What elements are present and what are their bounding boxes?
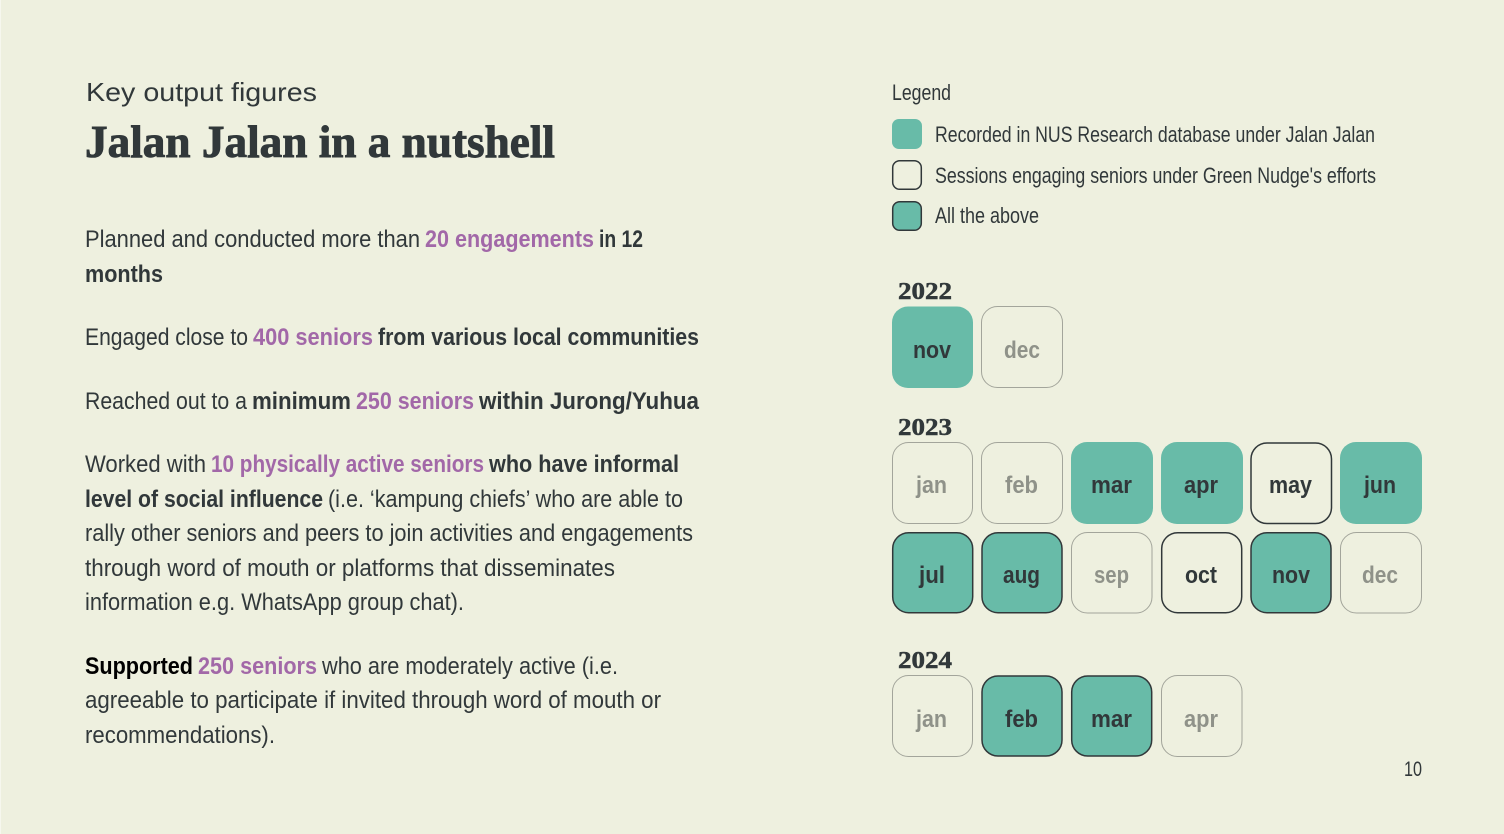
month: feb 2024: feb xyxy=(1005,706,1038,733)
legend item: sessions: Sessions engaging seniors under Green Nudge's efforts xyxy=(935,163,1376,188)
text block: active seniors xyxy=(85,451,693,616)
text block: active seniors: information e.g. WhatsApp group chat). xyxy=(85,589,464,616)
month: apr 2024: apr xyxy=(1184,706,1218,733)
text block: seniors reached: 250 seniors xyxy=(356,388,474,415)
month: nov 2023 xyxy=(1251,533,1331,613)
text block: seniors engaged: Engaged close to xyxy=(85,324,248,351)
text block: seniors reached xyxy=(85,388,700,415)
calendar 2024 xyxy=(892,648,1242,756)
month: aug 2023: aug xyxy=(1003,562,1040,589)
legend xyxy=(892,80,1376,230)
year label 2023: 2023 xyxy=(898,415,952,441)
page number: 10 xyxy=(1404,758,1422,781)
month: nov 2022 xyxy=(892,306,973,388)
kicker heading: Key output figures xyxy=(86,77,317,107)
legend item: recorded: Recorded in NUS Research database under Jalan Jalan xyxy=(935,122,1375,147)
month: apr 2023 xyxy=(1161,442,1243,524)
month: apr 2023: apr xyxy=(1184,472,1218,499)
text block: engagements: Planned and conducted more than xyxy=(85,226,420,253)
text block: moderately active seniors: 250 seniors xyxy=(198,653,317,680)
text block: engagements: months xyxy=(85,261,163,288)
month: feb 2023: feb xyxy=(1005,472,1038,499)
month: jan 2023: jan xyxy=(915,472,947,499)
text block: seniors engaged xyxy=(85,324,699,351)
month: jan 2024 xyxy=(892,676,972,756)
text block: active seniors: 10 physically active seniors xyxy=(211,451,484,478)
month: sep 2023 xyxy=(1072,532,1152,613)
month: dec 2022 xyxy=(982,306,1062,388)
month: jun 2023: jun xyxy=(1363,472,1396,499)
month: jan 2024: jan xyxy=(915,706,947,733)
text block: moderately active seniors: agreeable to participate if invited through word of mouth or xyxy=(85,687,661,714)
legend item: all: All the above xyxy=(935,203,1039,228)
legend item: all xyxy=(893,202,1039,230)
month: nov 2022: nov xyxy=(913,337,952,364)
month: oct 2023 xyxy=(1162,533,1242,613)
text block: active seniors: level of social influence xyxy=(85,486,323,513)
legend title: Legend xyxy=(892,80,951,105)
month: may 2023 xyxy=(1251,443,1332,524)
text block: active seniors: rally other seniors and peers to join activities and engagements xyxy=(85,520,693,547)
text block: moderately active seniors xyxy=(85,653,661,749)
text block: active seniors: who have informal xyxy=(488,451,679,478)
month: dec 2023: dec xyxy=(1362,562,1398,589)
month: jan 2023 xyxy=(892,442,972,524)
text block: moderately active seniors: Supported xyxy=(85,653,193,680)
text block: engagements xyxy=(85,226,643,288)
month: jul 2023 xyxy=(893,533,973,613)
legend item: sessions xyxy=(893,161,1376,189)
month: may 2023: may xyxy=(1269,472,1313,499)
month: apr 2024 xyxy=(1162,676,1242,756)
text block: active seniors: (i.e. ‘kampung chiefs’ who are able to xyxy=(328,486,683,513)
month: nov 2023: nov xyxy=(1272,562,1311,589)
text block: active seniors: through word of mouth or platforms that disseminates xyxy=(85,555,615,582)
month: sep 2023: sep xyxy=(1094,562,1129,589)
year label 2022: 2022 xyxy=(898,279,952,305)
text block: seniors reached: Reached out to a xyxy=(85,388,248,415)
month: feb 2024 xyxy=(982,676,1062,756)
calendar 2022 xyxy=(892,279,1062,388)
month: oct 2023: oct xyxy=(1185,562,1217,589)
text block: active seniors: Worked with xyxy=(85,451,206,478)
text block: seniors engaged: from various local communities xyxy=(378,324,699,351)
month: mar 2024 xyxy=(1072,676,1152,756)
month: feb 2023 xyxy=(982,442,1062,524)
text block: seniors reached: within Jurong/Yuhua xyxy=(478,388,700,415)
calendar 2023 xyxy=(892,415,1422,613)
text block: moderately active seniors: who are moderately active (i.e. xyxy=(321,653,618,680)
month: mar 2023 xyxy=(1071,442,1153,524)
month: jun 2023 xyxy=(1340,442,1422,524)
month: dec 2022: dec xyxy=(1004,337,1040,364)
text block: moderately active seniors: recommendations). xyxy=(85,722,275,749)
month: dec 2023 xyxy=(1340,532,1422,613)
text block: seniors reached: minimum xyxy=(252,388,351,415)
title: Jalan Jalan in a nutshell xyxy=(85,116,555,167)
legend item: recorded xyxy=(892,119,1375,149)
year label 2024: 2024 xyxy=(898,648,952,674)
text block: seniors engaged: 400 seniors xyxy=(253,324,373,351)
text block: engagements: in 12 xyxy=(599,226,643,253)
month: mar 2024: mar xyxy=(1091,706,1132,733)
month: mar 2023: mar xyxy=(1091,472,1132,499)
month: jul 2023: jul xyxy=(918,562,945,589)
month: aug 2023 xyxy=(982,533,1062,613)
text block: engagements: 20 engagements xyxy=(425,226,594,253)
